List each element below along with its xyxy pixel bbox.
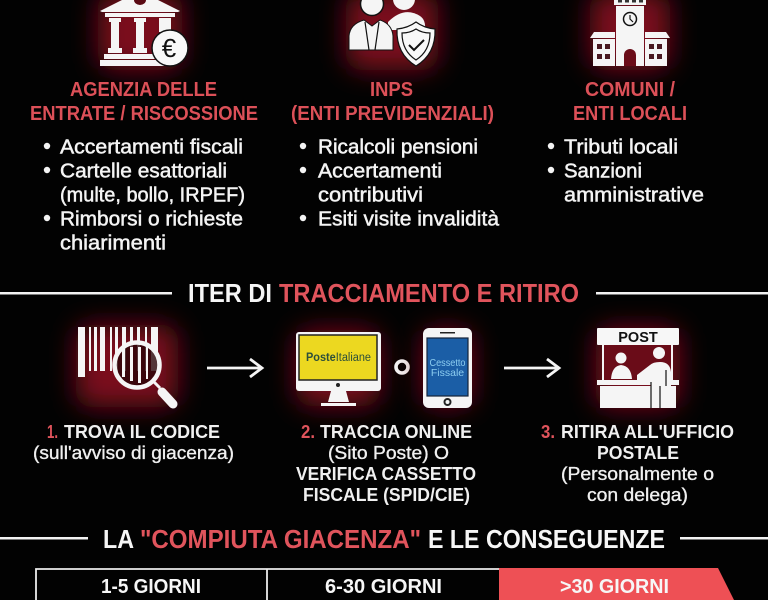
cell: 1-5 giorni: 1-5 GIORNI bbox=[101, 576, 201, 598]
icon: phone with Cassetto Fiscale: Cessetto bbox=[430, 357, 466, 369]
cell: 6-30 giorni: 6-30 GIORNI bbox=[325, 576, 442, 598]
panel: INPS bbox=[291, 0, 500, 230]
icon: town hall bbox=[590, 0, 670, 70]
heading: La compiuta giacenza e le conseguenze bbox=[103, 524, 665, 554]
list: INPS items: Esiti visite invalidità bbox=[318, 208, 500, 230]
arrow: step 1 to step 2 bbox=[207, 359, 262, 377]
heading: INPS enti previdenziali: INPS bbox=[370, 79, 413, 101]
icon: post office counter bbox=[596, 328, 680, 408]
step 2: track online bbox=[296, 328, 476, 505]
list: Agenzia delle Entrate items: Rimborsi o richieste bbox=[60, 208, 243, 230]
label: step 2: VERIFICA CASSETTO bbox=[296, 463, 476, 484]
heading: Comuni / Enti locali bbox=[573, 79, 687, 125]
cell: oltre 30 giorni bbox=[499, 568, 734, 600]
heading: Iter di tracciamento e ritiro: ITER DI bbox=[188, 278, 272, 308]
heading: Agenzia delle Entrate / Riscossione: ENTRATE / RISCOSSIONE bbox=[30, 103, 258, 125]
heading: Comuni / Enti locali: COMUNI / bbox=[585, 79, 675, 101]
label: step 3 bbox=[541, 421, 734, 505]
icon: bank with euro coin: € bbox=[162, 33, 177, 63]
list: INPS items: Accertamenti bbox=[318, 160, 442, 182]
label: step 3: POSTALE bbox=[597, 442, 679, 463]
label: step 1: 1. bbox=[47, 421, 58, 442]
panel: Agenzia delle Entrate bbox=[30, 0, 258, 254]
label: step 3: (Personalmente o bbox=[561, 463, 714, 484]
text: o bbox=[396, 361, 408, 373]
icon: monitor with Poste Italiane: PosteItaliane bbox=[306, 352, 371, 364]
label: step 3: con delega) bbox=[587, 484, 688, 505]
label: step 2: (Sito Poste) O bbox=[328, 442, 449, 463]
label: step 2: 2. bbox=[301, 421, 315, 442]
list: Agenzia delle Entrate items bbox=[44, 136, 245, 254]
icon: phone with Cassetto Fiscale: Fissale bbox=[431, 367, 464, 379]
label: step 1 bbox=[33, 421, 234, 463]
label: step 2: TRACCIA ONLINE bbox=[320, 421, 472, 442]
icon: monitor with Poste Italiane bbox=[296, 330, 381, 406]
list: Agenzia delle Entrate items: Cartelle esattoriali bbox=[60, 160, 227, 182]
heading: INPS enti previdenziali bbox=[291, 79, 494, 125]
cell: oltre 30 giorni: >30 GIORNI bbox=[560, 576, 669, 598]
label: step 2 bbox=[296, 421, 476, 505]
list: Agenzia delle Entrate items: chiarimenti bbox=[60, 232, 166, 254]
icon: post office counter: POST bbox=[618, 330, 658, 346]
list: Comuni items: amministrative bbox=[564, 184, 704, 206]
icon: phone with Cassetto Fiscale bbox=[423, 328, 472, 408]
heading: Agenzia delle Entrate / Riscossione bbox=[30, 79, 258, 125]
label: step 2: FISCALE (SPID/CIE) bbox=[303, 484, 470, 505]
icon: bank with euro coin bbox=[98, 0, 188, 70]
step 1: find the code bbox=[33, 325, 234, 463]
label: step 1: TROVA IL CODICE bbox=[64, 421, 220, 442]
label: step 3: RITIRA ALL'UFFICIO bbox=[561, 421, 734, 442]
timeline table bbox=[36, 568, 734, 600]
list: Agenzia delle Entrate items: Accertamenti fiscali bbox=[60, 136, 243, 158]
icon: barcode with magnifier bbox=[76, 325, 178, 407]
heading: La compiuta giacenza e le conseguenze: LA bbox=[103, 524, 134, 554]
step 3: collect at post office bbox=[541, 328, 734, 505]
list: INPS items bbox=[300, 136, 500, 230]
label: step 1: (sull'avviso di giacenza) bbox=[33, 442, 234, 463]
icon: people with shield bbox=[346, 0, 438, 70]
list: Agenzia delle Entrate items: (multe, bollo, IRPEF) bbox=[60, 184, 245, 206]
list: Comuni items: Sanzioni bbox=[564, 160, 642, 182]
list: Comuni items: Tributi locali bbox=[564, 136, 678, 158]
label: step 3: 3. bbox=[541, 421, 555, 442]
heading: La compiuta giacenza e le conseguenze: E LE CONSEGUENZE bbox=[428, 524, 665, 554]
list: Comuni items bbox=[548, 136, 704, 206]
heading: Agenzia delle Entrate / Riscossione: AGENZIA DELLE bbox=[70, 79, 217, 101]
list: INPS items: contributivi bbox=[318, 184, 423, 206]
heading: Iter di tracciamento e ritiro: TRACCIAMENTO E RITIRO bbox=[279, 278, 579, 308]
list: INPS items: Ricalcoli pensioni bbox=[318, 136, 478, 158]
heading: INPS enti previdenziali: (ENTI PREVIDENZIALI) bbox=[291, 103, 494, 125]
heading: La compiuta giacenza e le conseguenze: "COMPIUTA GIACENZA" bbox=[140, 524, 421, 554]
arrow: step 2 to step 3 bbox=[504, 359, 559, 377]
panel: Comuni bbox=[548, 0, 704, 206]
heading: Comuni / Enti locali: ENTI LOCALI bbox=[573, 103, 687, 125]
